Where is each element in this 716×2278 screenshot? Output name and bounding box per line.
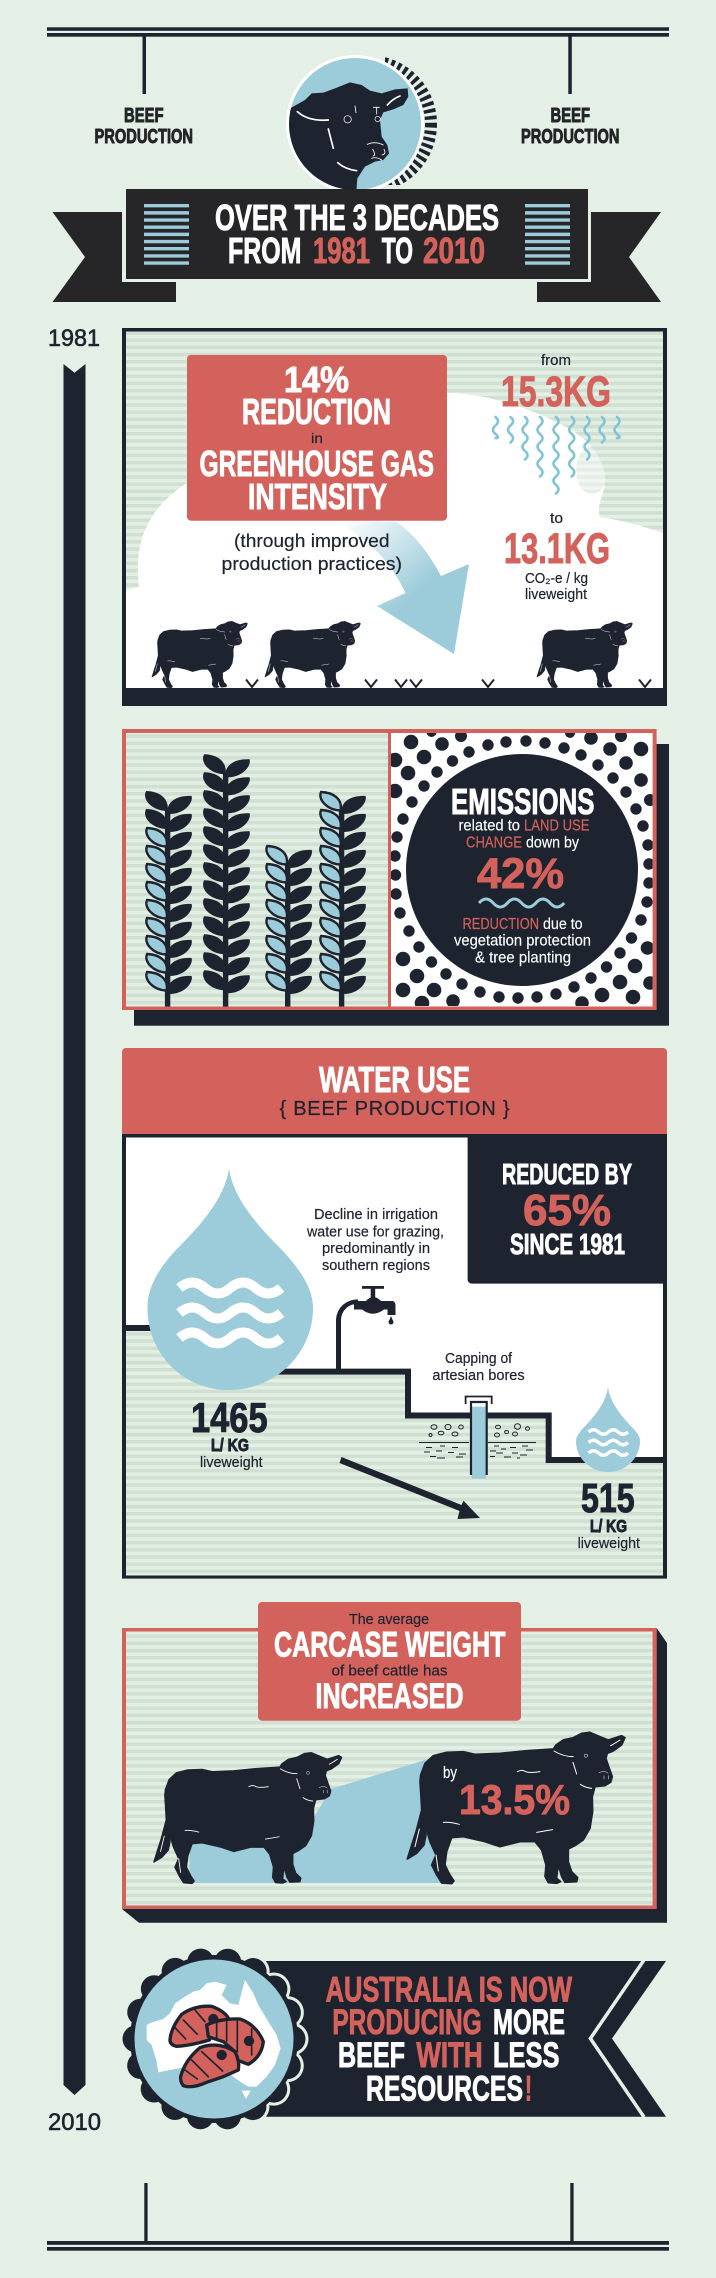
wave divider <box>479 899 564 907</box>
stat: from 15.3kg <box>501 353 611 416</box>
stripes left <box>144 204 189 265</box>
timeline bar <box>64 364 86 2095</box>
grass ticks <box>246 680 651 687</box>
title text <box>215 197 499 271</box>
dotted panel <box>388 727 657 1010</box>
water header: WATER USE <box>319 1059 470 1100</box>
water header <box>122 1048 667 1134</box>
ground step line <box>122 1328 667 1460</box>
text: decline in irrigation: predominantly in <box>322 1240 430 1257</box>
red label box: INCREASED <box>316 1677 464 1716</box>
stat: to 13.1kg: liveweight <box>525 587 587 603</box>
reduced by box: REDUCED BY <box>502 1159 632 1191</box>
reduced by box <box>468 1134 667 1284</box>
stat: from 15.3kg: from <box>541 353 571 369</box>
panel: land use emissions <box>122 727 669 1026</box>
text: capping of artesian bores: Capping of <box>445 1350 513 1367</box>
closing text: MORE <box>493 2003 565 2042</box>
stat: 515 <box>578 1475 640 1552</box>
stat: to 13.1kg: to <box>550 511 563 527</box>
steaks <box>170 2006 263 2087</box>
small cow <box>154 1753 342 1883</box>
emissions circle: down by <box>526 835 579 852</box>
red label box: of beef cattle has <box>332 1663 448 1680</box>
timeline end year: 2010 <box>48 2109 101 2136</box>
panel: carcase weight <box>122 1602 667 1923</box>
closing ribbon <box>263 1960 666 2117</box>
caption: production practices: (through improved <box>234 531 390 551</box>
blue growth wedge <box>190 1758 443 1883</box>
stat: to 13.1kg: CO₂-e / kg <box>525 571 588 587</box>
icon: small water drop <box>576 1387 640 1472</box>
cow 3 <box>537 621 632 688</box>
stat: 1465: liveweight <box>200 1455 263 1471</box>
text: capping of artesian bores <box>432 1350 525 1384</box>
stat: 515: liveweight <box>578 1536 640 1552</box>
faint cloud lobe <box>576 446 608 494</box>
red label box <box>258 1602 521 1721</box>
caption: production practices <box>222 531 402 574</box>
cow 1 <box>152 621 247 688</box>
text: decline in irrigation: water use for grazing, <box>306 1223 444 1240</box>
icon: scalloped australia steak badge <box>130 1955 298 2123</box>
timeline start year: 1981 <box>48 325 100 352</box>
closing text: WITH <box>416 2036 483 2075</box>
stat: to 13.1kg <box>504 511 610 603</box>
red label box: The average <box>349 1611 429 1628</box>
text: decline in irrigation: southern regions <box>322 1257 430 1274</box>
emissions circle: LAND USE <box>524 818 590 835</box>
emissions circle: due to <box>543 916 583 933</box>
stat: 13.5%: 13.5% <box>459 1776 570 1823</box>
title ribbon <box>52 189 661 302</box>
cow 2 <box>265 621 360 688</box>
text: capping of artesian bores: artesian bores <box>432 1367 525 1384</box>
icon: large water drop <box>148 1168 313 1390</box>
striped plant panel <box>126 733 388 1006</box>
australia map <box>147 1980 281 2099</box>
emissions circle <box>406 754 638 986</box>
title text: FROM <box>228 230 301 271</box>
frame divider <box>388 733 391 1006</box>
ribbon centre banner <box>126 189 588 279</box>
red reduction box: in <box>311 430 323 446</box>
icon: cow head medallion <box>280 55 431 197</box>
plants <box>145 754 366 1006</box>
closing text: BEEF <box>338 2036 405 2075</box>
closing text: ! <box>525 2070 532 2109</box>
emissions circle: REDUCTION <box>462 916 539 933</box>
label: beef production left <box>94 105 193 148</box>
stat: 13.5%: by <box>443 1763 457 1782</box>
stat: 1465: 1465 <box>191 1394 268 1441</box>
label: beef production right: PRODUCTION <box>521 126 620 148</box>
stat: 1465: L/ KG <box>211 1435 249 1455</box>
red reduction box: GREENHOUSE GAS <box>200 443 434 484</box>
reduced by box: SINCE 1981 <box>510 1229 625 1261</box>
gradient arrow <box>333 522 469 654</box>
panel: greenhouse gas intensity <box>122 328 667 706</box>
panel 3d shadow <box>122 1628 667 1923</box>
red reduction box: REDUCTION <box>242 391 391 432</box>
text: decline in irrigation <box>306 1206 444 1274</box>
title text: 2010 <box>423 230 485 271</box>
icon: artesian bore <box>419 1396 536 1479</box>
title text: TO <box>382 230 413 271</box>
emissions circle: CHANGE <box>466 835 522 852</box>
stat: from 15.3kg: 15.3KG <box>501 368 611 416</box>
red reduction box: 14% <box>284 359 349 400</box>
red label box: CARCASE WEIGHT <box>274 1626 506 1665</box>
title text: 1981 <box>313 230 370 271</box>
title text: OVER THE 3 DECADES <box>215 197 499 238</box>
label: beef production left: PRODUCTION <box>94 126 193 148</box>
red reduction box: INTENSITY <box>248 476 387 517</box>
icon: tap <box>336 1286 396 1369</box>
ribbon tails <box>52 212 661 302</box>
stat: 515: L/ KG <box>590 1516 627 1536</box>
text: decline in irrigation: Decline in irrigation <box>314 1206 438 1223</box>
emissions circle: vegetation protection <box>454 933 591 950</box>
stat: 1465 <box>191 1394 268 1471</box>
panel: water use <box>122 1048 667 1579</box>
large cow <box>407 1732 625 1884</box>
stat: to 13.1kg: 13.1KG <box>504 525 610 573</box>
icon: gas squiggles <box>493 417 620 494</box>
stat: 515: 515 <box>581 1475 635 1521</box>
stripes right <box>525 204 570 265</box>
arrow: downward trend <box>340 1457 480 1519</box>
label: beef production left: BEEF <box>124 105 164 127</box>
stat: 13.5% <box>443 1763 570 1823</box>
closing text: LESS <box>493 2036 559 2075</box>
label: beef production right <box>521 105 620 148</box>
water body <box>122 1134 667 1579</box>
water header: { BEEF PRODUCTION } <box>280 1098 510 1120</box>
red reduction box <box>187 355 447 521</box>
closing text: AUSTRALIA IS NOW <box>326 1971 572 2010</box>
emissions circle: EMISSIONS <box>451 781 594 822</box>
top double rule with hanging lines <box>47 27 669 94</box>
emissions circle: & tree planting <box>475 950 571 967</box>
emissions circle: 42% <box>477 850 564 898</box>
reduced by box: 65% <box>523 1186 611 1235</box>
white cloud <box>126 393 663 688</box>
emissions circle: related to <box>458 818 520 835</box>
label: beef production right: BEEF <box>550 105 590 127</box>
closing text: RESOURCES <box>366 2070 523 2109</box>
closing text: PRODUCING <box>332 2003 482 2042</box>
caption: production practices: production practices) <box>222 554 402 574</box>
stepped striped ground <box>126 1328 663 1576</box>
closing text <box>326 1971 572 2109</box>
bottom double rule with rising lines <box>47 2183 669 2251</box>
